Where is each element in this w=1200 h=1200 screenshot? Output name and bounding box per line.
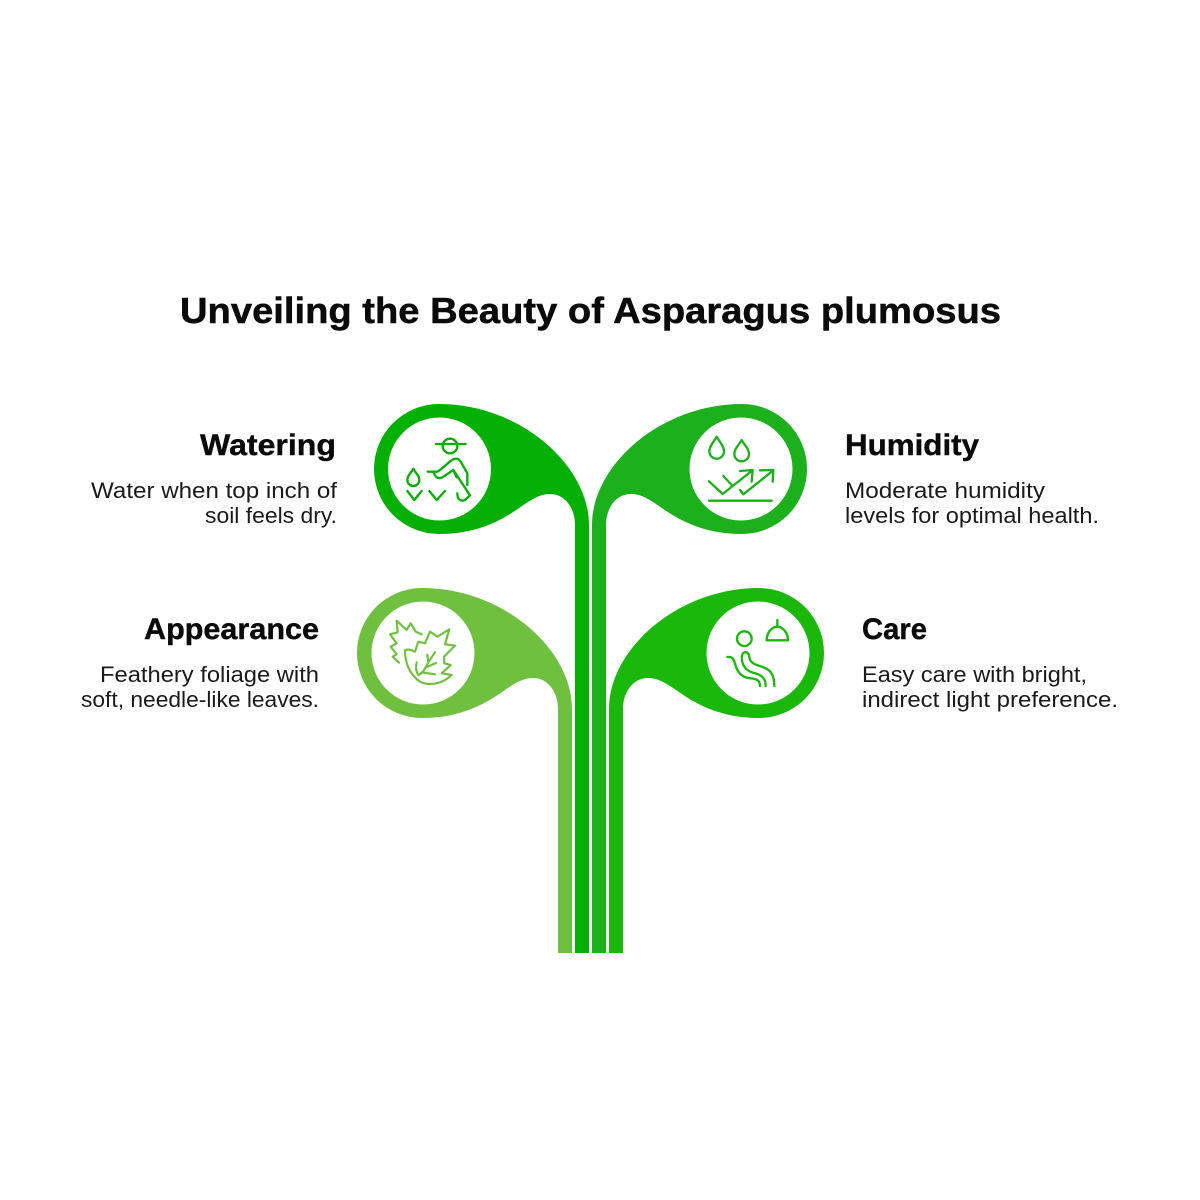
icon circle: appearance <box>372 602 474 704</box>
heading: appearance: Appearance <box>144 613 319 646</box>
description: watering: soil feels dry. <box>205 503 337 528</box>
title: Unveiling the Beauty of Asparagus plumosus <box>180 290 1001 331</box>
description: appearance: soft, needle-like leaves. <box>81 687 319 712</box>
icon circle: watering <box>388 418 491 520</box>
stem and leaf: watering <box>374 404 589 953</box>
heading: humidity: Humidity <box>845 429 979 462</box>
stem and leaf: humidity <box>592 404 807 953</box>
description: humidity: levels for optimal health. <box>845 503 1099 528</box>
description: appearance: Feathery foliage with <box>100 662 319 687</box>
description: care <box>862 662 1118 712</box>
description: watering <box>91 478 338 528</box>
description: humidity <box>845 478 1099 528</box>
stem and leaf: care <box>609 588 824 953</box>
description: humidity: Moderate humidity <box>845 478 1046 503</box>
icon circle: care <box>706 602 810 704</box>
panel: humidity <box>592 404 1099 953</box>
heading: care: Care <box>862 613 927 646</box>
icon: leaves <box>390 621 455 684</box>
panel: appearance <box>81 588 572 953</box>
stem and leaf: appearance <box>357 588 572 953</box>
panel: care <box>609 588 1118 953</box>
icon: care <box>727 620 788 686</box>
description: care: indirect light preference. <box>862 687 1118 712</box>
icon circle: humidity <box>690 418 792 520</box>
icon: humidity <box>709 437 773 501</box>
description: care: Easy care with bright, <box>862 662 1087 687</box>
description: watering: Water when top inch of <box>91 478 338 503</box>
description: appearance <box>81 662 319 712</box>
icon: gardener <box>407 439 470 501</box>
heading: watering: Watering <box>200 429 336 462</box>
panel: watering <box>91 404 589 953</box>
